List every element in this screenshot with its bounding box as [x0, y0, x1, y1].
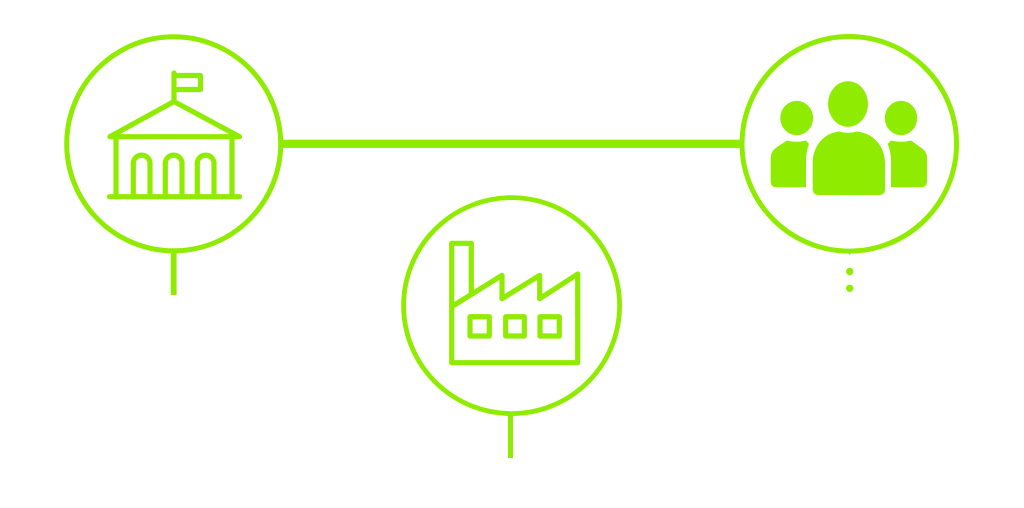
connector line between school and people — [281, 140, 742, 148]
school circle — [67, 37, 281, 251]
stem tick — [847, 252, 852, 255]
people node — [742, 36, 957, 292]
factory circle — [404, 198, 620, 414]
icon: group of people — [771, 81, 927, 195]
dotted continuation — [846, 268, 853, 292]
icon: school building — [110, 73, 240, 197]
factory node — [404, 198, 620, 458]
school node — [67, 37, 281, 295]
school stem — [171, 251, 177, 295]
factory stem — [508, 413, 513, 458]
people circle — [742, 36, 957, 251]
icon: factory — [452, 243, 578, 363]
